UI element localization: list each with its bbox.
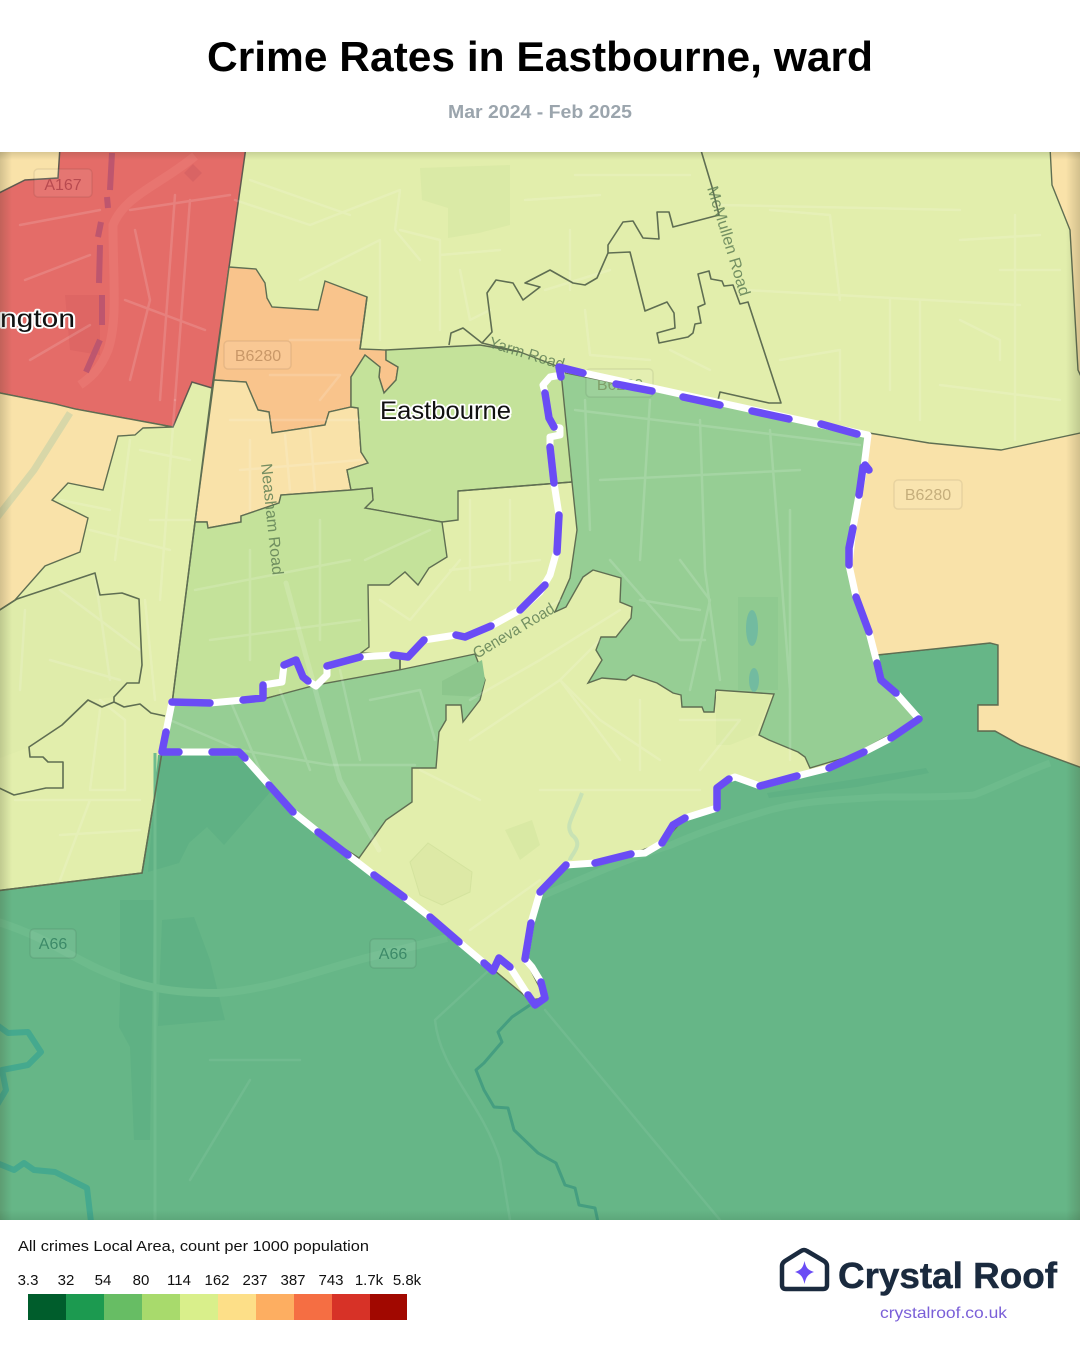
shield: B6280 west xyxy=(224,341,291,369)
legend tick labels: 32 xyxy=(58,1272,74,1289)
ward: cream east xyxy=(849,432,1080,769)
road names: McMullen Road xyxy=(703,184,753,298)
ward: dark green south xyxy=(0,643,1080,1225)
legend tick labels: 80 xyxy=(133,1272,149,1289)
shield: A167: A167 xyxy=(44,177,82,194)
shield: A66 west: A66 xyxy=(39,936,67,953)
ward: mid green south-west xyxy=(162,654,485,858)
choropleth map xyxy=(0,147,1080,1225)
base area: pale green wards xyxy=(0,152,1080,998)
ward: top-left cream corner xyxy=(0,152,59,192)
road names: Geneva Road xyxy=(470,600,558,662)
road names: Neasham Road xyxy=(257,463,286,576)
shield: A167 xyxy=(34,169,92,197)
road shields xyxy=(30,169,962,968)
legend tick labels: 5.8k xyxy=(393,1272,422,1289)
legend tick labels: 237 xyxy=(242,1272,268,1289)
legend title: All crimes Local Area, count per 1000 population xyxy=(18,1238,369,1255)
map edge vignette xyxy=(0,152,1080,1220)
icon: house with star xyxy=(782,1250,827,1289)
legend tick labels: 114 xyxy=(167,1272,191,1289)
shield: B6280 centre xyxy=(586,369,653,397)
rivers xyxy=(0,1005,598,1222)
ward: red Darlington centre xyxy=(0,147,246,427)
ward: light green Neasham south xyxy=(172,488,447,704)
land use patches xyxy=(156,164,880,1272)
ward: cream north-east corner xyxy=(1050,147,1080,385)
legend tick labels: 387 xyxy=(280,1272,306,1289)
shield: B6280 east xyxy=(894,480,962,509)
legend tick labels: 54 xyxy=(95,1272,111,1289)
road names xyxy=(257,184,753,662)
road network xyxy=(0,153,1060,1220)
legend xyxy=(18,1238,422,1320)
legend tick labels: 1.7k xyxy=(355,1272,384,1289)
legend tick labels xyxy=(18,1272,422,1289)
ward: mid green Eastbourne east xyxy=(555,372,919,768)
legend tick labels: 162 xyxy=(204,1272,230,1289)
road names: Yarm Road xyxy=(487,335,566,374)
ward: cream centre xyxy=(195,380,368,528)
ward: light green Eastbourne north xyxy=(347,345,572,522)
ward: orange north-centre xyxy=(214,267,398,433)
shield: B6280 centre: B6280 xyxy=(597,377,643,394)
shield: B6280 west: B6280 xyxy=(235,348,281,365)
legend tick labels: 743 xyxy=(318,1272,344,1289)
selected ward boundary: dashed outline xyxy=(162,367,919,1005)
logo wordmark: Crystal Roof xyxy=(838,1255,1058,1296)
logo url: crystalroof.co.uk xyxy=(880,1305,1008,1322)
shield: A66 east: A66 xyxy=(379,946,407,963)
shield: A66 east xyxy=(370,939,416,968)
shield: A66 west xyxy=(30,929,76,958)
shield: B6280 east: B6280 xyxy=(905,487,951,504)
ward: cream west xyxy=(0,392,173,613)
ward boundary lines xyxy=(0,147,781,891)
legend colour scale xyxy=(28,1294,407,1320)
logo: Crystal Roof xyxy=(782,1250,1058,1322)
subtitle: date range: Mar 2024 - Feb 2025 xyxy=(448,101,632,122)
legend tick labels: 3.3 xyxy=(18,1272,38,1289)
title: Crime Rates in Eastbourne, ward xyxy=(207,33,873,80)
place label: Eastbourne: Eastbourne xyxy=(380,397,511,425)
place label: Darlington (cropped): ngton xyxy=(0,305,75,333)
